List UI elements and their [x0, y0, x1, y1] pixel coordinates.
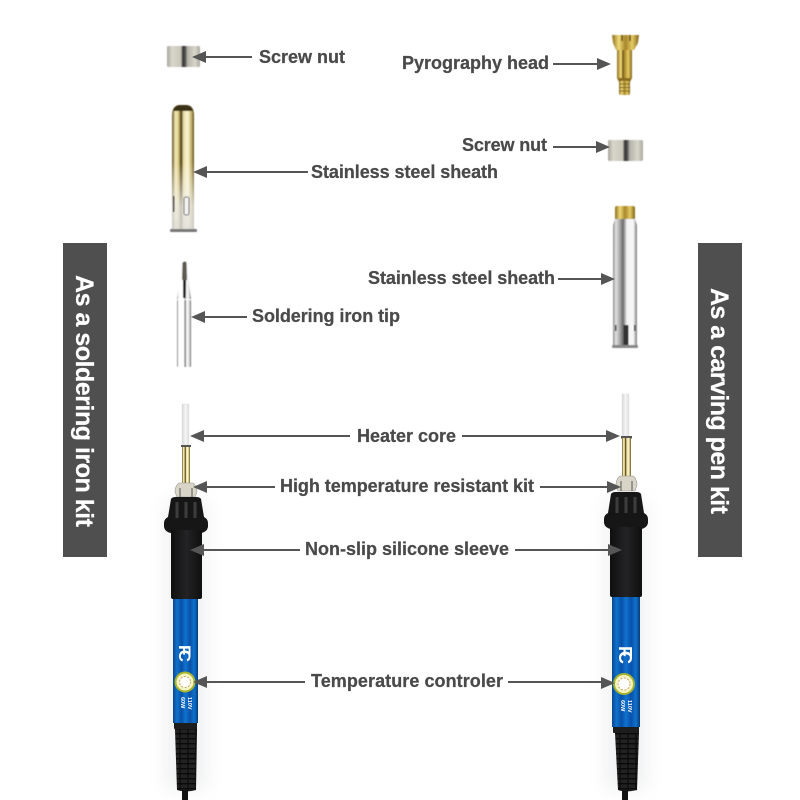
banner: as a carving pen kit: As a carving pen kit: [705, 288, 733, 515]
right blue handle: [612, 597, 640, 727]
right voltage text: 60W: [619, 700, 625, 712]
label: left sheath: Stainless steel sheath: [311, 162, 498, 182]
banner: as a carving pen kit: [698, 243, 742, 557]
right silicone sleeve: [610, 527, 642, 597]
right high temperature resistant kit: [616, 476, 637, 491]
right heater core: [622, 394, 629, 436]
label: right sheath: Stainless steel sheath: [368, 268, 555, 288]
label: heater core: Heater core: [357, 426, 456, 446]
arrow: soldering iron tip: [191, 311, 247, 323]
right strain relief: [613, 727, 639, 792]
right cable: [622, 790, 628, 800]
left high temperature resistant kit: [175, 483, 197, 497]
icon: left iron shadow: [165, 500, 207, 790]
banner: as a soldering iron kit: [63, 243, 107, 557]
label: pyrography head: Pyrography head: [402, 53, 549, 73]
label: soldering iron tip: Soldering iron tip: [252, 306, 400, 326]
part: left screw nut: [167, 46, 200, 67]
part: right stainless steel sheath: [612, 206, 638, 348]
icon: right pen shadow: [605, 500, 647, 790]
right metal tube: [621, 436, 632, 478]
label: right screw nut: Screw nut: [462, 135, 547, 155]
left metal tube: [181, 445, 191, 485]
part: pyrography head: [612, 35, 639, 95]
right temperature controller dial: [614, 674, 634, 694]
banner: as a soldering iron kit: As a soldering iron kit: [70, 275, 98, 528]
part: soldering iron tip: [177, 262, 191, 367]
arrow: right sheath: [558, 273, 615, 285]
arrows: non-slip silicone sleeve: [190, 544, 622, 556]
left silicone sleeve: [171, 530, 202, 599]
label: high temperature resistant kit: High temperature resistant kit: [280, 476, 534, 496]
part: right screw nut: [608, 140, 643, 161]
right carving pen: [604, 394, 648, 800]
arrow: left sheath: [193, 166, 308, 178]
left FC logo: FC: [175, 645, 194, 662]
right FC logo: FC: [615, 646, 635, 664]
label: left screw nut: Screw nut: [259, 47, 345, 67]
label: non-slip silicone sleeve: Non-slip silicone sleeve: [305, 539, 509, 559]
part: left stainless steel sheath: [170, 105, 197, 232]
arrow: pyrography head: [553, 58, 611, 70]
arrows: high temperature resistant kit: [193, 481, 621, 493]
left voltage text: 110V: [186, 697, 192, 710]
arrow: right screw nut: [553, 141, 610, 153]
label: temperature controler: Temperature controler: [311, 671, 503, 691]
right voltage text: 110V: [626, 700, 632, 713]
left blue handle: [173, 599, 198, 723]
arrows: heater core: [190, 430, 620, 442]
right collar nut: [604, 492, 648, 529]
arrow: left screw nut: [192, 51, 252, 63]
left cable: [182, 790, 188, 800]
left soldering iron: [164, 404, 208, 800]
left temperature controller dial: [176, 672, 194, 692]
left voltage text: 60W: [179, 697, 185, 709]
left collar nut: [164, 497, 208, 533]
arrows: temperature controler: [193, 676, 615, 689]
left heater core: [182, 404, 189, 445]
left strain relief: [174, 723, 197, 792]
